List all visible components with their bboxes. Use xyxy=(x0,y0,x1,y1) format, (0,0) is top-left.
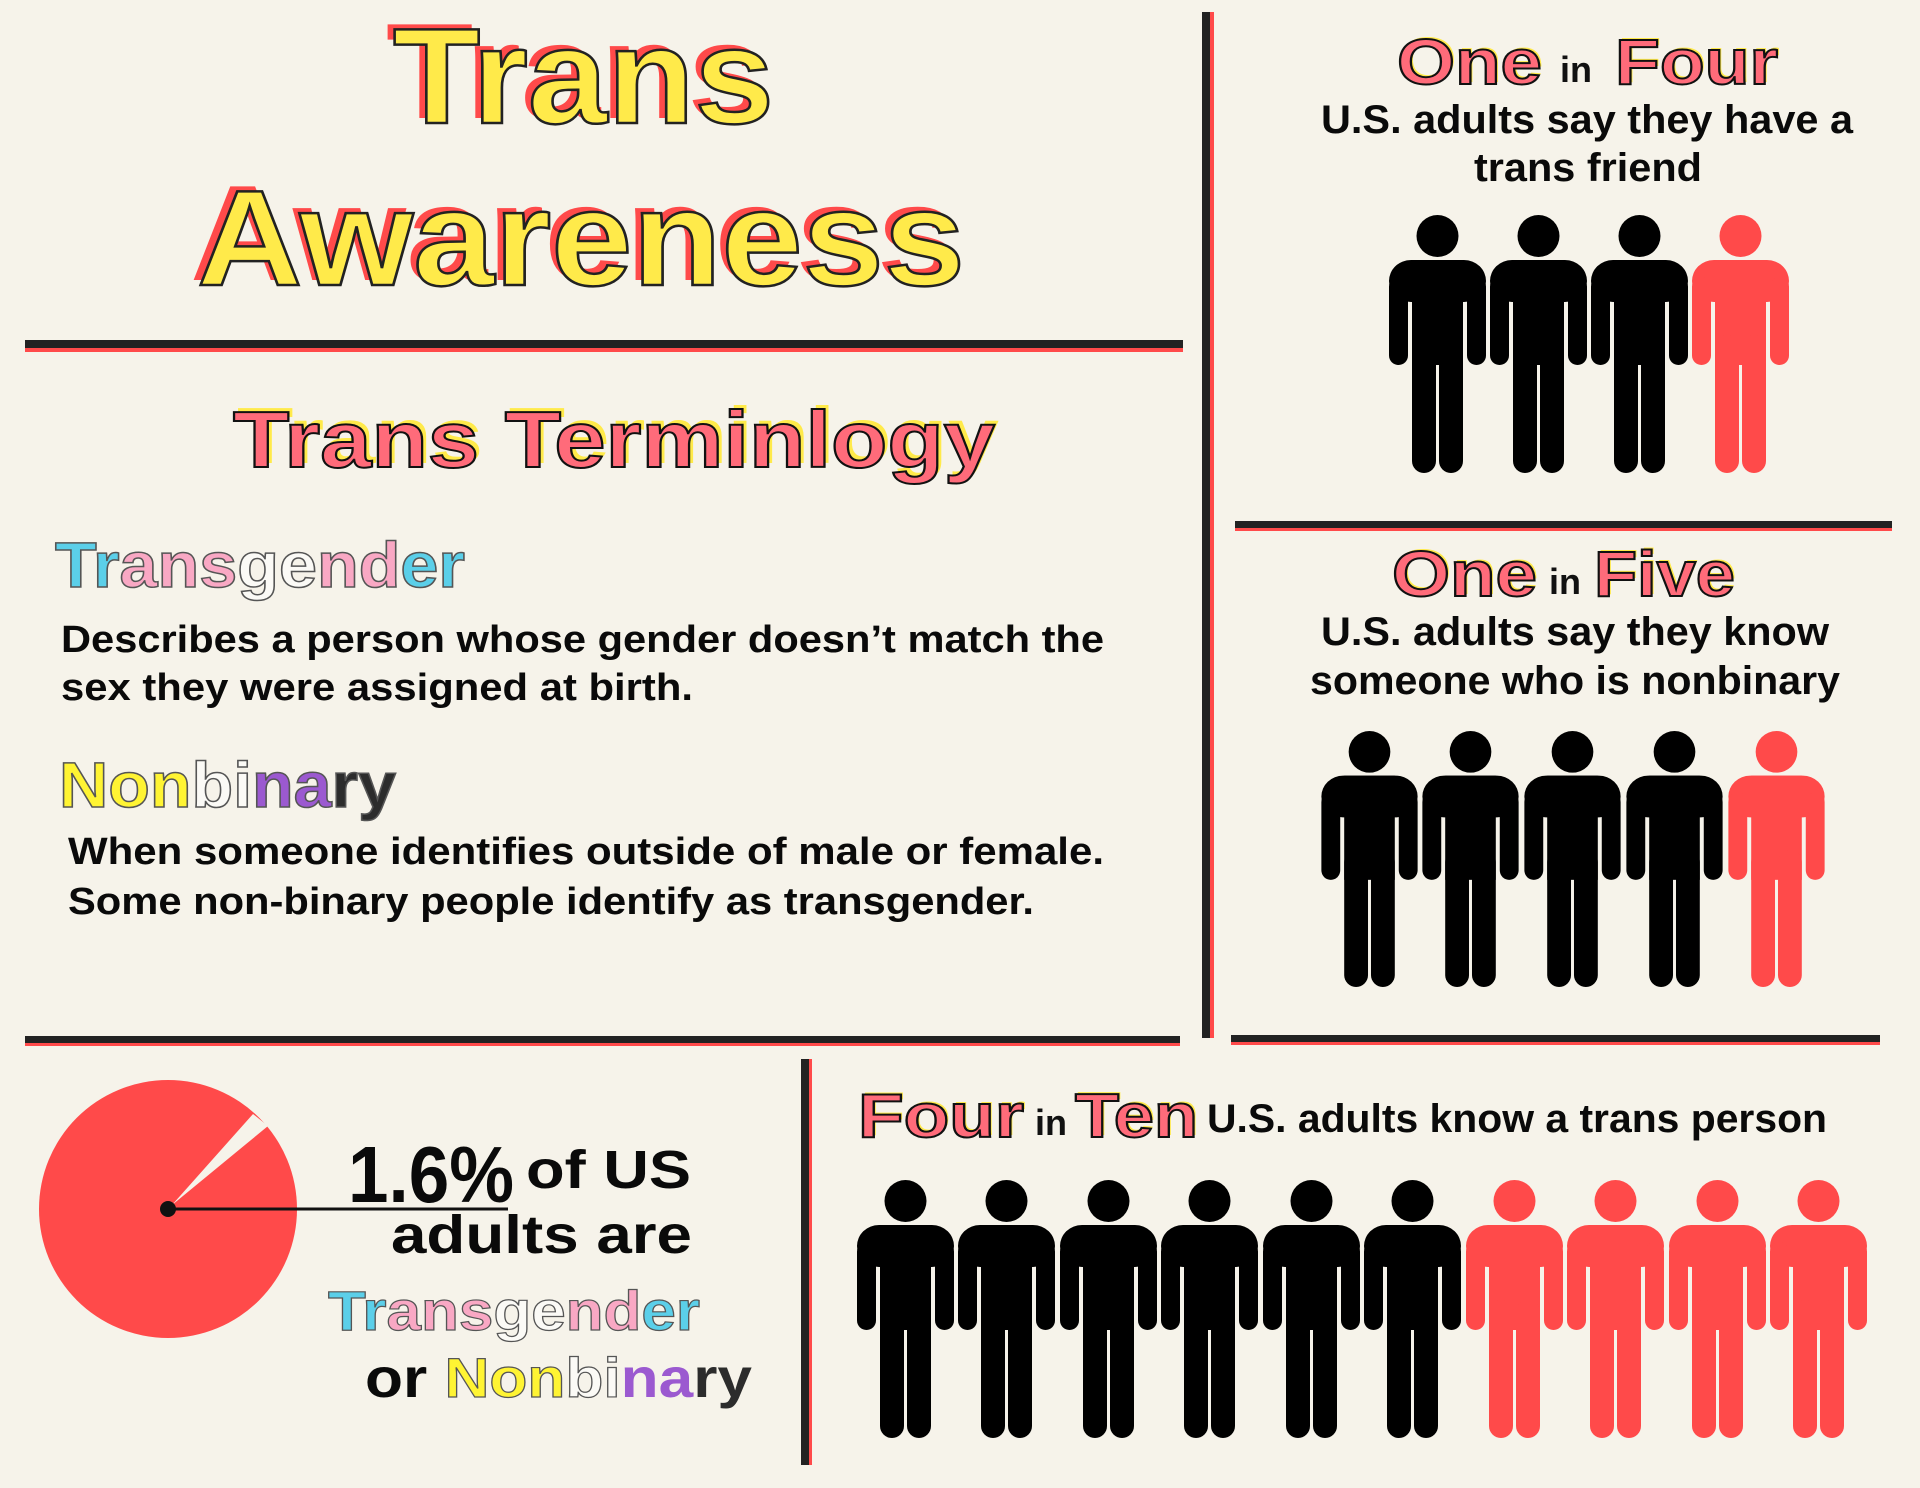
stat: one in four xyxy=(1321,24,1854,190)
stat text: 1.6% of us adults: 1.6% xyxy=(348,1130,514,1219)
definition: nonbinary xyxy=(68,831,1104,923)
stat text: 1.6% of us adults: Transgender xyxy=(328,1279,700,1342)
stat text: 1.6% of us adults: of US xyxy=(526,1140,691,1200)
title: Trans xyxy=(393,0,774,152)
title: Awareness xyxy=(190,157,958,309)
stat: one in four: One xyxy=(1397,26,1542,98)
title xyxy=(190,0,965,314)
stat: four in ten xyxy=(858,1080,1827,1151)
pictogram: one in five xyxy=(1321,731,1825,987)
pictogram: one in four xyxy=(1389,215,1789,473)
stat: one in five: Five xyxy=(1594,538,1735,610)
pie chart: 1.6% xyxy=(39,1080,508,1338)
definition: transgender: Describes a person whose gender doesn’t match the xyxy=(61,619,1104,661)
title: Awareness xyxy=(197,162,965,314)
term: nonbinary: Nonbinary xyxy=(59,749,396,821)
definition: nonbinary: Some non-binary people identify as transgender. xyxy=(68,881,1034,923)
stat text: 1.6% of us adults xyxy=(328,1130,752,1409)
stat: four in ten: Four xyxy=(860,1080,1026,1149)
stat: four in ten: Ten xyxy=(1075,1082,1198,1151)
definition: transgender xyxy=(61,619,1104,709)
stat: one in five: Five xyxy=(1596,536,1737,608)
stat: one in five: someone who is nonbinary xyxy=(1310,659,1841,703)
definition: nonbinary: When someone identifies outside of male or female. xyxy=(68,831,1104,873)
stat: one in four: Four xyxy=(1615,26,1778,98)
heading: trans terminology: Trans Terminlogy xyxy=(233,395,996,484)
stat: one in five xyxy=(1310,536,1841,703)
stat: four in ten: Ten xyxy=(1077,1080,1200,1149)
stat: one in five: One xyxy=(1394,536,1539,608)
stat: four in ten: U.S. adults know a trans person xyxy=(1207,1097,1827,1141)
stat: one in five: U.S. adults say they know xyxy=(1321,610,1830,654)
definition: transgender: sex they were assigned at birth. xyxy=(61,667,693,709)
stat: one in five: One xyxy=(1392,538,1537,610)
stat text: 1.6% of us adults: or Nonbinary xyxy=(365,1346,752,1409)
stat: one in four: Four xyxy=(1617,24,1780,96)
term: transgender: Transgender xyxy=(55,529,465,601)
stat: one in four: One xyxy=(1399,24,1544,96)
stat: four in ten: in xyxy=(1035,1102,1067,1143)
pictogram: four in ten xyxy=(857,1180,1867,1438)
stat: one in four: in xyxy=(1560,49,1592,90)
stat: one in four: trans friend xyxy=(1474,146,1702,190)
stat text: 1.6% of us adults: adults are xyxy=(391,1205,692,1265)
stat: four in ten: Four xyxy=(858,1082,1024,1151)
stat: one in five: in xyxy=(1549,561,1581,602)
heading: trans terminology: Trans Terminlogy xyxy=(237,391,1000,480)
stat: one in four: U.S. adults say they have a xyxy=(1321,98,1854,142)
